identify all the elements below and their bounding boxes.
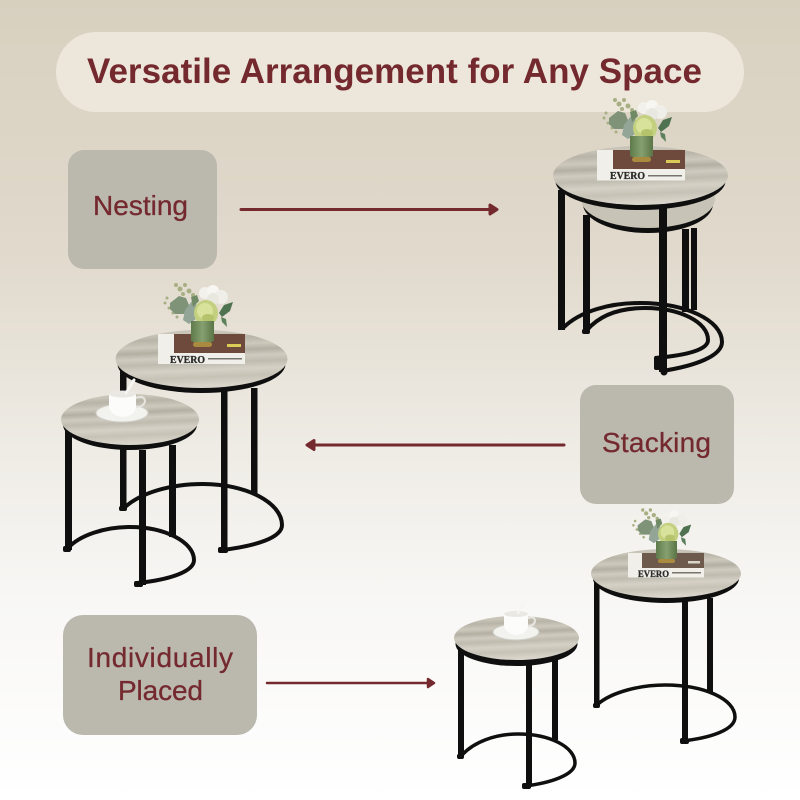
vase with flowers <box>632 508 691 563</box>
small table <box>454 602 579 789</box>
cup and saucer <box>493 602 539 640</box>
large table <box>591 508 741 744</box>
book <box>158 334 245 366</box>
book: EVERO <box>638 570 669 580</box>
arrow: nesting to table <box>241 205 497 214</box>
cup and saucer <box>96 380 148 422</box>
label: stacking: Stacking <box>602 427 711 458</box>
label: individually placed: Individually <box>87 642 233 673</box>
book: EVERO <box>170 354 205 366</box>
arrow: individually placed to tables <box>267 679 434 687</box>
label: individually placed <box>63 615 257 735</box>
stacked tables <box>61 283 288 587</box>
book <box>597 150 685 182</box>
title: Versatile Arrangement for Any Space <box>87 52 702 91</box>
vase with flowers <box>602 98 672 162</box>
book: EVERO <box>610 170 645 182</box>
label: individually placed: Placed <box>118 675 203 706</box>
book <box>628 553 704 580</box>
label: nesting <box>68 150 217 269</box>
title <box>56 32 744 112</box>
vase with flowers <box>164 283 233 347</box>
label: stacking <box>580 385 734 504</box>
arrow: stacking to table <box>307 440 564 450</box>
nested tables <box>553 98 728 376</box>
label: nesting: Nesting <box>93 190 188 221</box>
individually placed tables <box>454 508 741 789</box>
